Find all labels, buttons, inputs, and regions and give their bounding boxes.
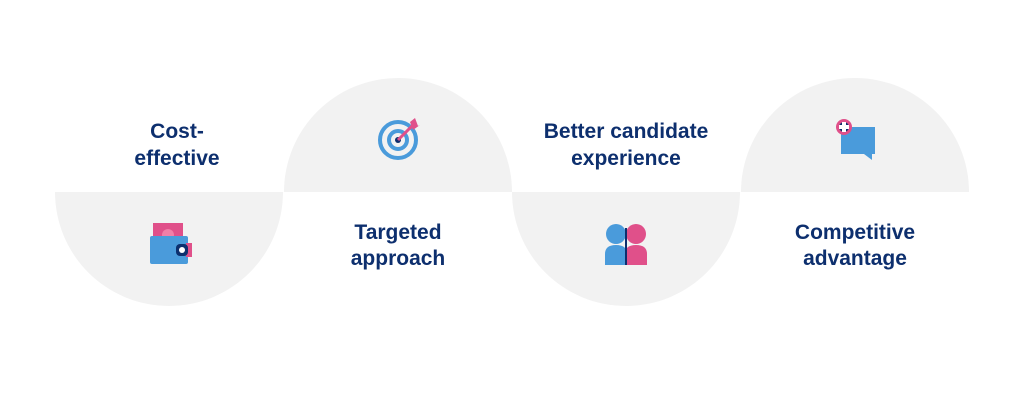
icon: wallet (150, 223, 192, 264)
heading: Better candidate experience (544, 120, 708, 170)
heading: Cost-effective: effective (134, 147, 220, 170)
panel: semicircle 4 top (741, 78, 969, 192)
heading: Better candidate experience: Better candidate (544, 120, 708, 143)
heading: Targeted approach (351, 221, 445, 270)
heading: Targeted approach: approach (351, 247, 445, 270)
heading: Targeted approach: Targeted (354, 221, 442, 244)
panel: semicircle 3 bottom (512, 192, 740, 306)
heading: Cost-effective (134, 120, 220, 170)
panel: semicircle 1 bottom (55, 192, 283, 306)
heading: Cost-effective: Cost- (150, 120, 204, 143)
icon: chat bubble (836, 119, 875, 160)
heading: Competitive advantage: Competitive (795, 221, 915, 244)
heading: Competitive advantage (795, 221, 915, 270)
icon: target (380, 118, 420, 158)
heading: Competitive advantage: advantage (803, 247, 907, 270)
heading: Better candidate experience: experience (571, 147, 681, 170)
icon: people (605, 224, 647, 265)
panel: semicircle 2 top (284, 78, 512, 192)
